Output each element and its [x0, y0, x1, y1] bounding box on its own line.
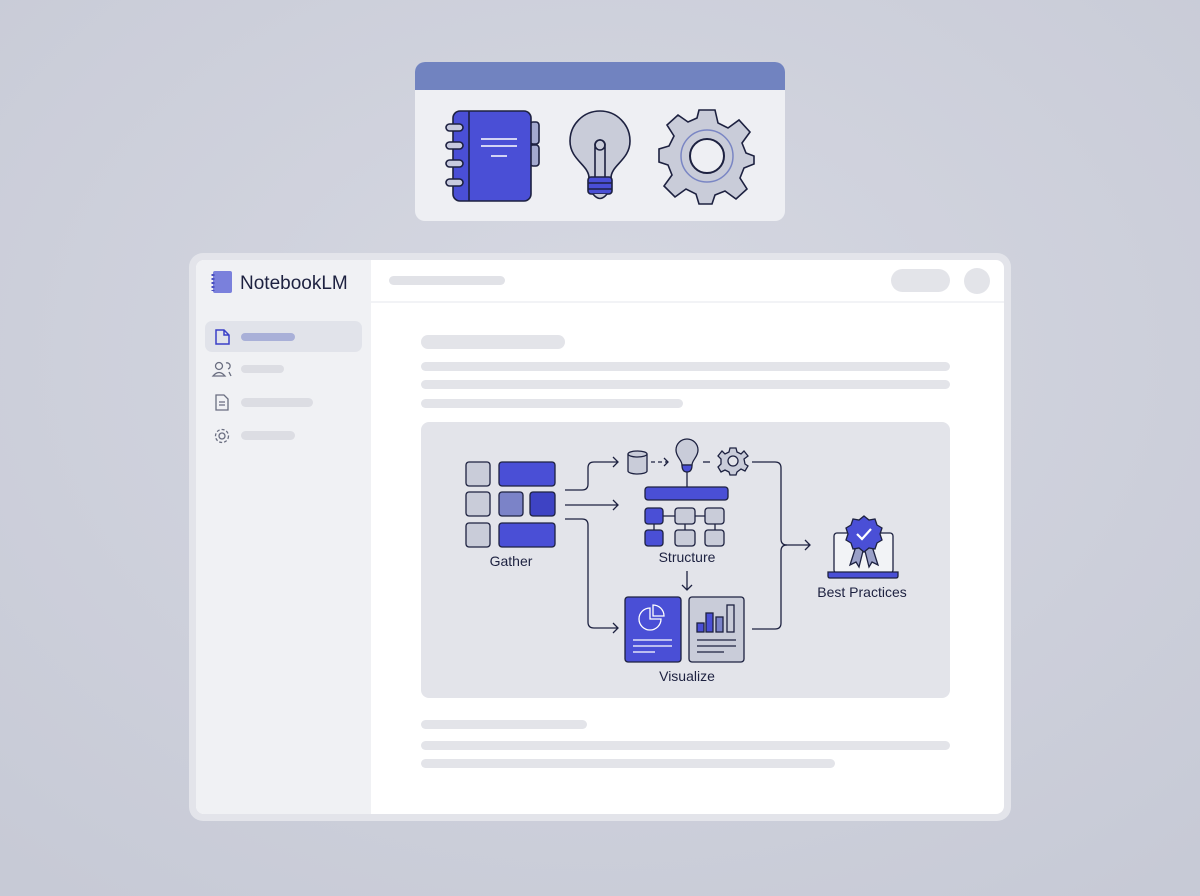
icon: gear	[659, 110, 754, 204]
logo: NotebookLM	[240, 273, 348, 294]
best practices: Best Practices	[817, 584, 907, 600]
gather	[466, 462, 555, 569]
app window	[189, 253, 1011, 821]
visualize: Visualize	[659, 668, 715, 684]
gather: Gather	[490, 553, 533, 569]
small icons	[628, 439, 748, 475]
structure	[645, 487, 728, 565]
icon: light bulb	[570, 111, 630, 198]
text placeholders top	[421, 335, 950, 408]
nav items	[205, 321, 362, 442]
visualize	[625, 597, 744, 684]
diagram panel	[421, 422, 950, 698]
sidebar	[196, 260, 371, 814]
arrows	[565, 457, 810, 633]
text placeholders bottom	[421, 720, 950, 768]
top icon card	[415, 62, 785, 221]
best practices	[817, 516, 907, 600]
icon: notebook	[446, 111, 539, 201]
structure: Structure	[659, 549, 716, 565]
top bar	[371, 268, 1004, 302]
